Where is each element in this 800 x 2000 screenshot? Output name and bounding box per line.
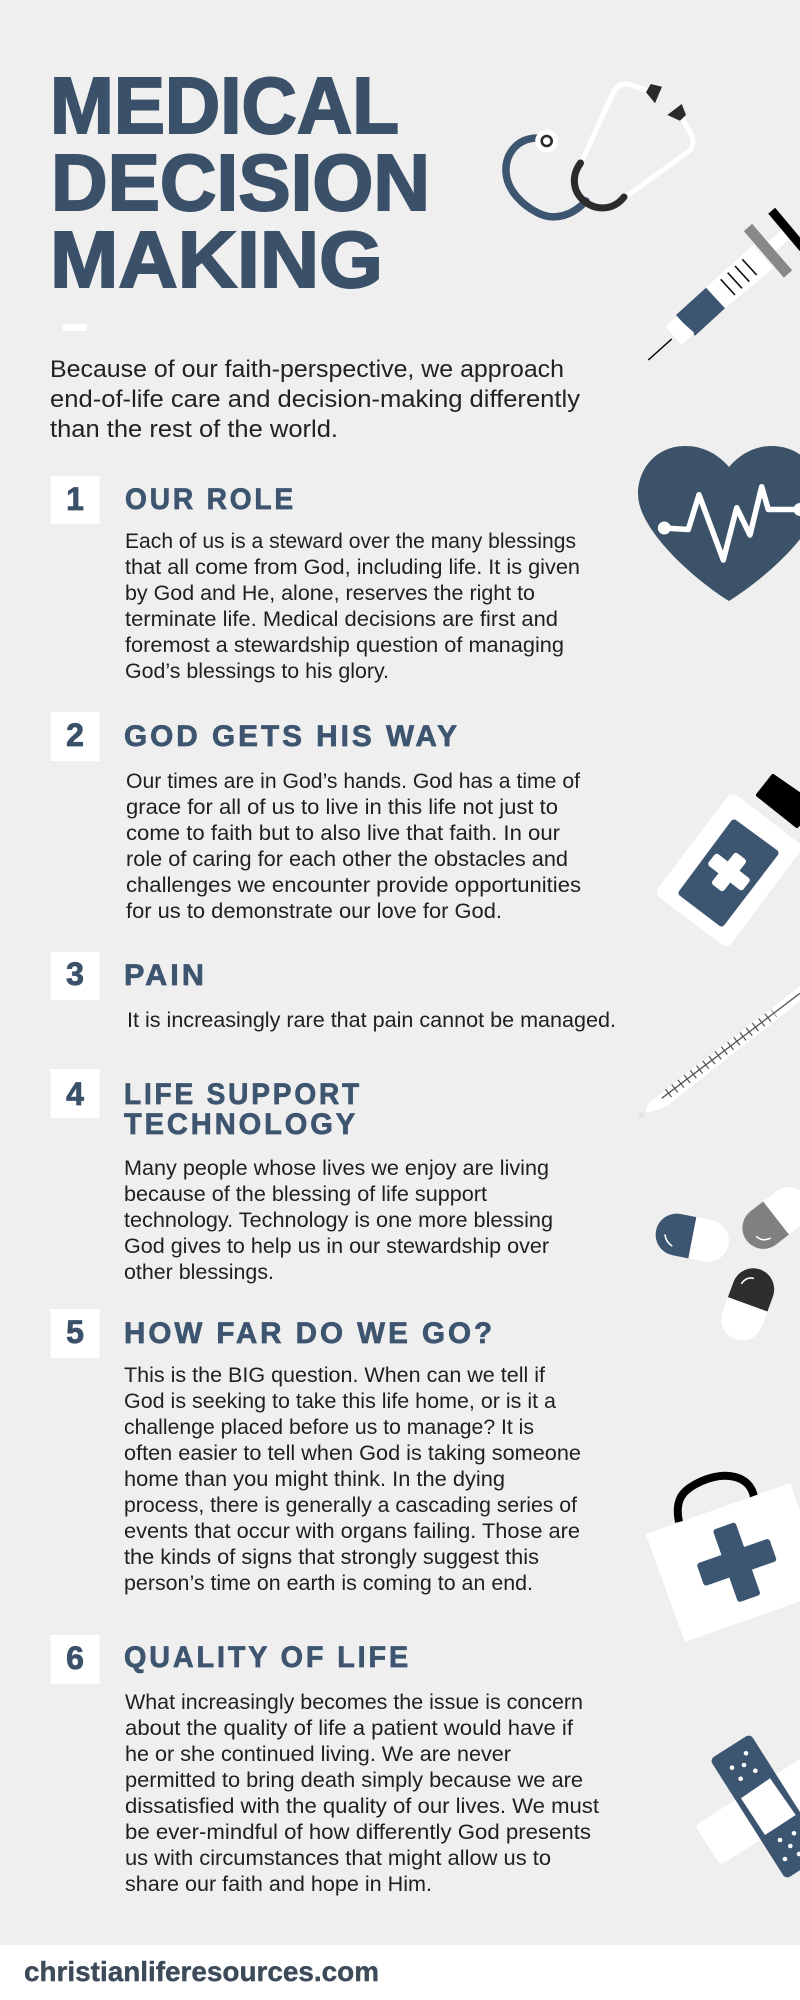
heading: life support technology: LIFE SUPPORT	[124, 1078, 362, 1111]
body text 6: be ever-mindful of how differently God presents	[125, 1821, 591, 1844]
number badge 2	[50, 712, 100, 761]
number badge 6: 6	[66, 1640, 84, 1676]
number badge 3	[50, 952, 100, 1000]
body text 6: about the quality of life a patient would have if	[125, 1717, 573, 1740]
title: MEDICAL	[50, 61, 399, 150]
panel: section 4 life support technology	[50, 1069, 553, 1284]
number badge 2: 2	[66, 717, 84, 753]
body text 2: come to faith but to also live that faith. In our	[126, 822, 560, 845]
body text 1: foremost a stewardship question of managing	[125, 634, 564, 657]
icon: heart with ecg	[638, 446, 800, 601]
icon: bandage	[695, 1734, 800, 1879]
body text 4: God gives to help us in our stewardship over	[124, 1235, 549, 1258]
footer band	[0, 1945, 800, 2000]
body text 6	[125, 1691, 599, 1896]
title: DECISION	[51, 138, 430, 227]
body text 4: other blessings.	[124, 1261, 274, 1284]
body text 1: terminate life. Medical decisions are first and	[125, 608, 558, 631]
body text 2	[126, 770, 581, 923]
number badge 4: 4	[66, 1076, 84, 1112]
number badge 4	[50, 1069, 100, 1118]
body text 6: us with circumstances that might allow us to	[125, 1847, 551, 1870]
panel: section 5 how far do we go	[50, 1309, 581, 1595]
number badge 6	[50, 1635, 100, 1684]
body text 4: Many people whose lives we enjoy are living	[124, 1157, 549, 1180]
heading: life support technology	[124, 1078, 362, 1141]
body text 2: grace for all of us to live in this life not just to	[126, 796, 558, 819]
intro text: than the rest of the world.	[50, 416, 338, 443]
icon: black capsule	[715, 1262, 780, 1346]
body text 4: technology. Technology is one more blessing	[124, 1209, 553, 1232]
body text 5: This is the BIG question. When can we tell if	[124, 1364, 545, 1387]
title: MAKING	[50, 215, 383, 304]
heading: pain: PAIN	[124, 959, 207, 992]
body text 5: events that occur with organs failing. Those are	[124, 1520, 580, 1543]
icon: pill bottle	[664, 776, 800, 939]
icon: grey capsule	[734, 1179, 800, 1257]
title accent dash	[63, 324, 87, 331]
number badge 1: 1	[66, 481, 84, 517]
body text 2: challenges we encounter provide opportunities	[126, 874, 581, 897]
number badge 5	[50, 1309, 100, 1358]
heading: how far do we go: HOW FAR DO WE GO?	[124, 1317, 495, 1350]
body text 1	[125, 530, 580, 683]
body text 4	[124, 1157, 553, 1284]
body text 1: Each of us is a steward over the many blessings	[125, 530, 576, 553]
body text 5: challenge placed before us to manage? It is	[124, 1416, 534, 1439]
body text 6: he or she continued living. We are never	[125, 1743, 511, 1766]
body text 6: permitted to bring death simply because we are	[125, 1769, 583, 1792]
intro text: end-of-life care and decision-making differently	[50, 386, 581, 413]
icon: syringe	[648, 211, 800, 360]
heading: life support technology: TECHNOLOGY	[124, 1108, 358, 1141]
body text 4: because of the blessing of life support	[124, 1183, 487, 1206]
footer website: christianliferesources.com	[24, 1956, 379, 1987]
icon: stethoscope	[506, 84, 693, 217]
body text 5: often easier to tell when God is taking someone	[124, 1442, 581, 1465]
body text 2: for us to demonstrate our love for God.	[126, 900, 502, 923]
body text 2: Our times are in God’s hands. God has a time of	[126, 770, 580, 793]
body text 1: by God and He, alone, reserves the right to	[125, 582, 535, 605]
number badge 1	[50, 476, 100, 524]
icon: blue capsule	[652, 1210, 733, 1265]
body text 6: dissatisfied with the quality of our lives. We must	[125, 1795, 599, 1818]
body text 6: share our faith and hope in Him.	[125, 1873, 432, 1896]
title	[50, 61, 430, 304]
body text 5: person’s time on earth is coming to an end.	[124, 1572, 533, 1595]
body text 5: God is seeking to take this life home, or is it a	[124, 1390, 556, 1413]
panel: section 2 god gets his way	[50, 712, 581, 923]
body text 5: process, there is generally a cascading series of	[124, 1494, 577, 1517]
panel: section 3 pain	[50, 952, 616, 1032]
body text 5	[124, 1364, 581, 1595]
panel: section 1 our role	[50, 476, 580, 683]
number badge 3: 3	[66, 956, 84, 992]
body text 6: What increasingly becomes the issue is concern	[125, 1691, 583, 1714]
heading: our role: OUR ROLE	[125, 483, 296, 516]
body text 3: It is increasingly rare that pain cannot be managed.	[127, 1009, 616, 1032]
panel: section 6 quality of life	[50, 1635, 599, 1896]
number badge 5: 5	[66, 1314, 84, 1350]
body text 5: the kinds of signs that strongly suggest this	[124, 1546, 539, 1569]
body text 2: role of caring for each other the obstacles and	[126, 848, 568, 871]
heading: quality of life: QUALITY OF LIFE	[124, 1641, 411, 1674]
icon: first aid kit	[646, 1476, 800, 1642]
icon: thermometer needle	[638, 986, 800, 1118]
body text 5: home than you might think. In the dying	[124, 1468, 505, 1491]
intro text	[50, 356, 581, 443]
intro text: Because of our faith-perspective, we approach	[50, 356, 564, 383]
body text 1: God’s blessings to his glory.	[125, 660, 389, 683]
heading: god gets his way: GOD GETS HIS WAY	[124, 720, 460, 753]
body text 1: that all come from God, including life. It is given	[125, 556, 580, 579]
